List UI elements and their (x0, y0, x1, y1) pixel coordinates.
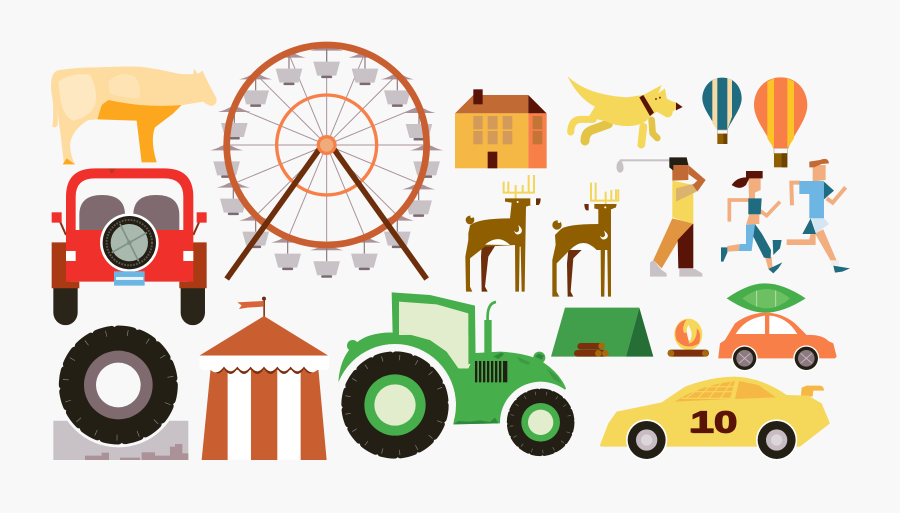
icon: cow (51, 66, 217, 164)
grille (475, 361, 507, 382)
seats (79, 195, 179, 232)
icon: deer right (552, 183, 618, 297)
icon: jeep (52, 168, 207, 325)
spokes (227, 45, 427, 245)
window mesh (675, 381, 735, 402)
icon: tractor (334, 292, 581, 466)
icon: hot air balloon teal (702, 78, 742, 144)
inner ring (277, 95, 377, 195)
icon: canoe (727, 283, 806, 313)
icon: race car (600, 377, 830, 461)
logs (668, 350, 709, 357)
cab (392, 292, 476, 368)
icon: deer left (465, 175, 541, 292)
front wheel (509, 391, 572, 454)
number 10: 10 (691, 406, 737, 440)
icon: golfer (617, 157, 706, 277)
gondolas (210, 45, 443, 278)
icon: tire in mud (53, 323, 188, 460)
icon: orange car (718, 313, 837, 371)
spare tire (100, 213, 159, 272)
body (338, 333, 566, 424)
mirrors (52, 212, 207, 235)
antlers (504, 175, 534, 198)
antlers (591, 183, 618, 204)
outer ring (227, 45, 427, 245)
wheels (53, 283, 205, 325)
fenders (52, 242, 79, 288)
log pile (574, 343, 609, 357)
roll bar and body (66, 168, 193, 282)
ground (53, 421, 188, 460)
icon: dog (567, 76, 683, 145)
icon: house (455, 89, 547, 168)
wheels (626, 419, 797, 461)
club (617, 159, 670, 173)
icon: woman runner (721, 171, 782, 273)
icon: circus tent (199, 297, 329, 460)
icon: hot air balloon orange (754, 77, 807, 167)
license plate (114, 271, 145, 286)
icon: man runner (773, 159, 850, 273)
flag (237, 297, 266, 317)
icon: camping tent (551, 308, 653, 357)
icon: ferris wheel (210, 45, 443, 279)
rear wheel (345, 355, 445, 455)
exhaust (484, 302, 496, 353)
support legs (227, 148, 427, 279)
mud texture (453, 352, 562, 424)
icon: campfire (668, 319, 709, 357)
hub (317, 135, 337, 155)
